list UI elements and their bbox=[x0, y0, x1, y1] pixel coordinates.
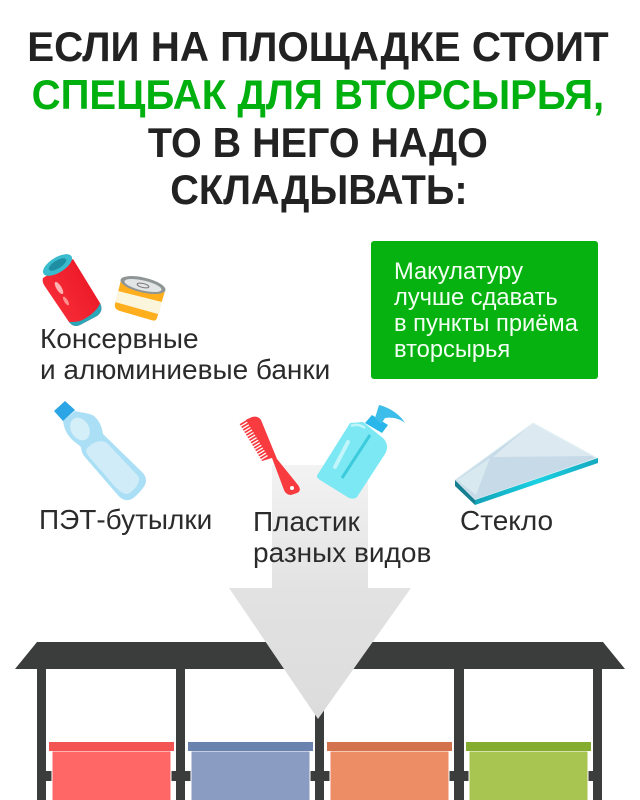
red bin bbox=[49, 742, 174, 800]
shelter posts bbox=[37, 665, 602, 800]
label: PET bottles: ПЭТ-бутылки bbox=[39, 504, 212, 535]
callout: waste paper: Макулатуру bbox=[394, 259, 523, 285]
title line 1: ЕСЛИ НА ПЛОЩАДКЕ СТОИТ bbox=[27, 23, 609, 70]
callout: waste paper bbox=[371, 241, 598, 379]
green bin bbox=[466, 742, 591, 800]
label: plastic: Пластик bbox=[253, 506, 360, 537]
label: cans: Консервные bbox=[40, 323, 199, 354]
callout: waste paper: вторсырья bbox=[394, 337, 510, 363]
icon: glass sheet bbox=[455, 423, 598, 505]
label: cans: и алюминиевые банки bbox=[40, 354, 330, 385]
title line 4: СКЛАДЫВАТЬ: bbox=[170, 166, 468, 213]
icon: red can bbox=[40, 250, 101, 326]
shelter with bins bbox=[15, 642, 625, 800]
blue bin bbox=[188, 742, 313, 800]
title line 2 green: СПЕЦБАК ДЛЯ ВТОРСЫРЬЯ, bbox=[32, 71, 604, 118]
icon: tin can bbox=[115, 273, 167, 321]
callout: waste paper: лучше сдавать bbox=[394, 285, 558, 311]
title line 3: ТО В НЕГО НАДО bbox=[148, 119, 488, 166]
orange bin bbox=[327, 742, 452, 800]
label: glass: Стекло bbox=[460, 505, 553, 536]
arrow down bbox=[229, 465, 411, 719]
icon: soap dispenser bbox=[317, 405, 405, 499]
shelter roof bbox=[15, 642, 625, 669]
callout: waste paper: в пункты приёма bbox=[394, 311, 578, 337]
label: cans bbox=[40, 323, 330, 385]
icon: comb bbox=[239, 417, 300, 495]
label: plastic bbox=[253, 506, 431, 568]
title bbox=[27, 23, 609, 213]
label: plastic: разных видов bbox=[253, 537, 431, 568]
icon: PET bottle bbox=[54, 401, 146, 500]
